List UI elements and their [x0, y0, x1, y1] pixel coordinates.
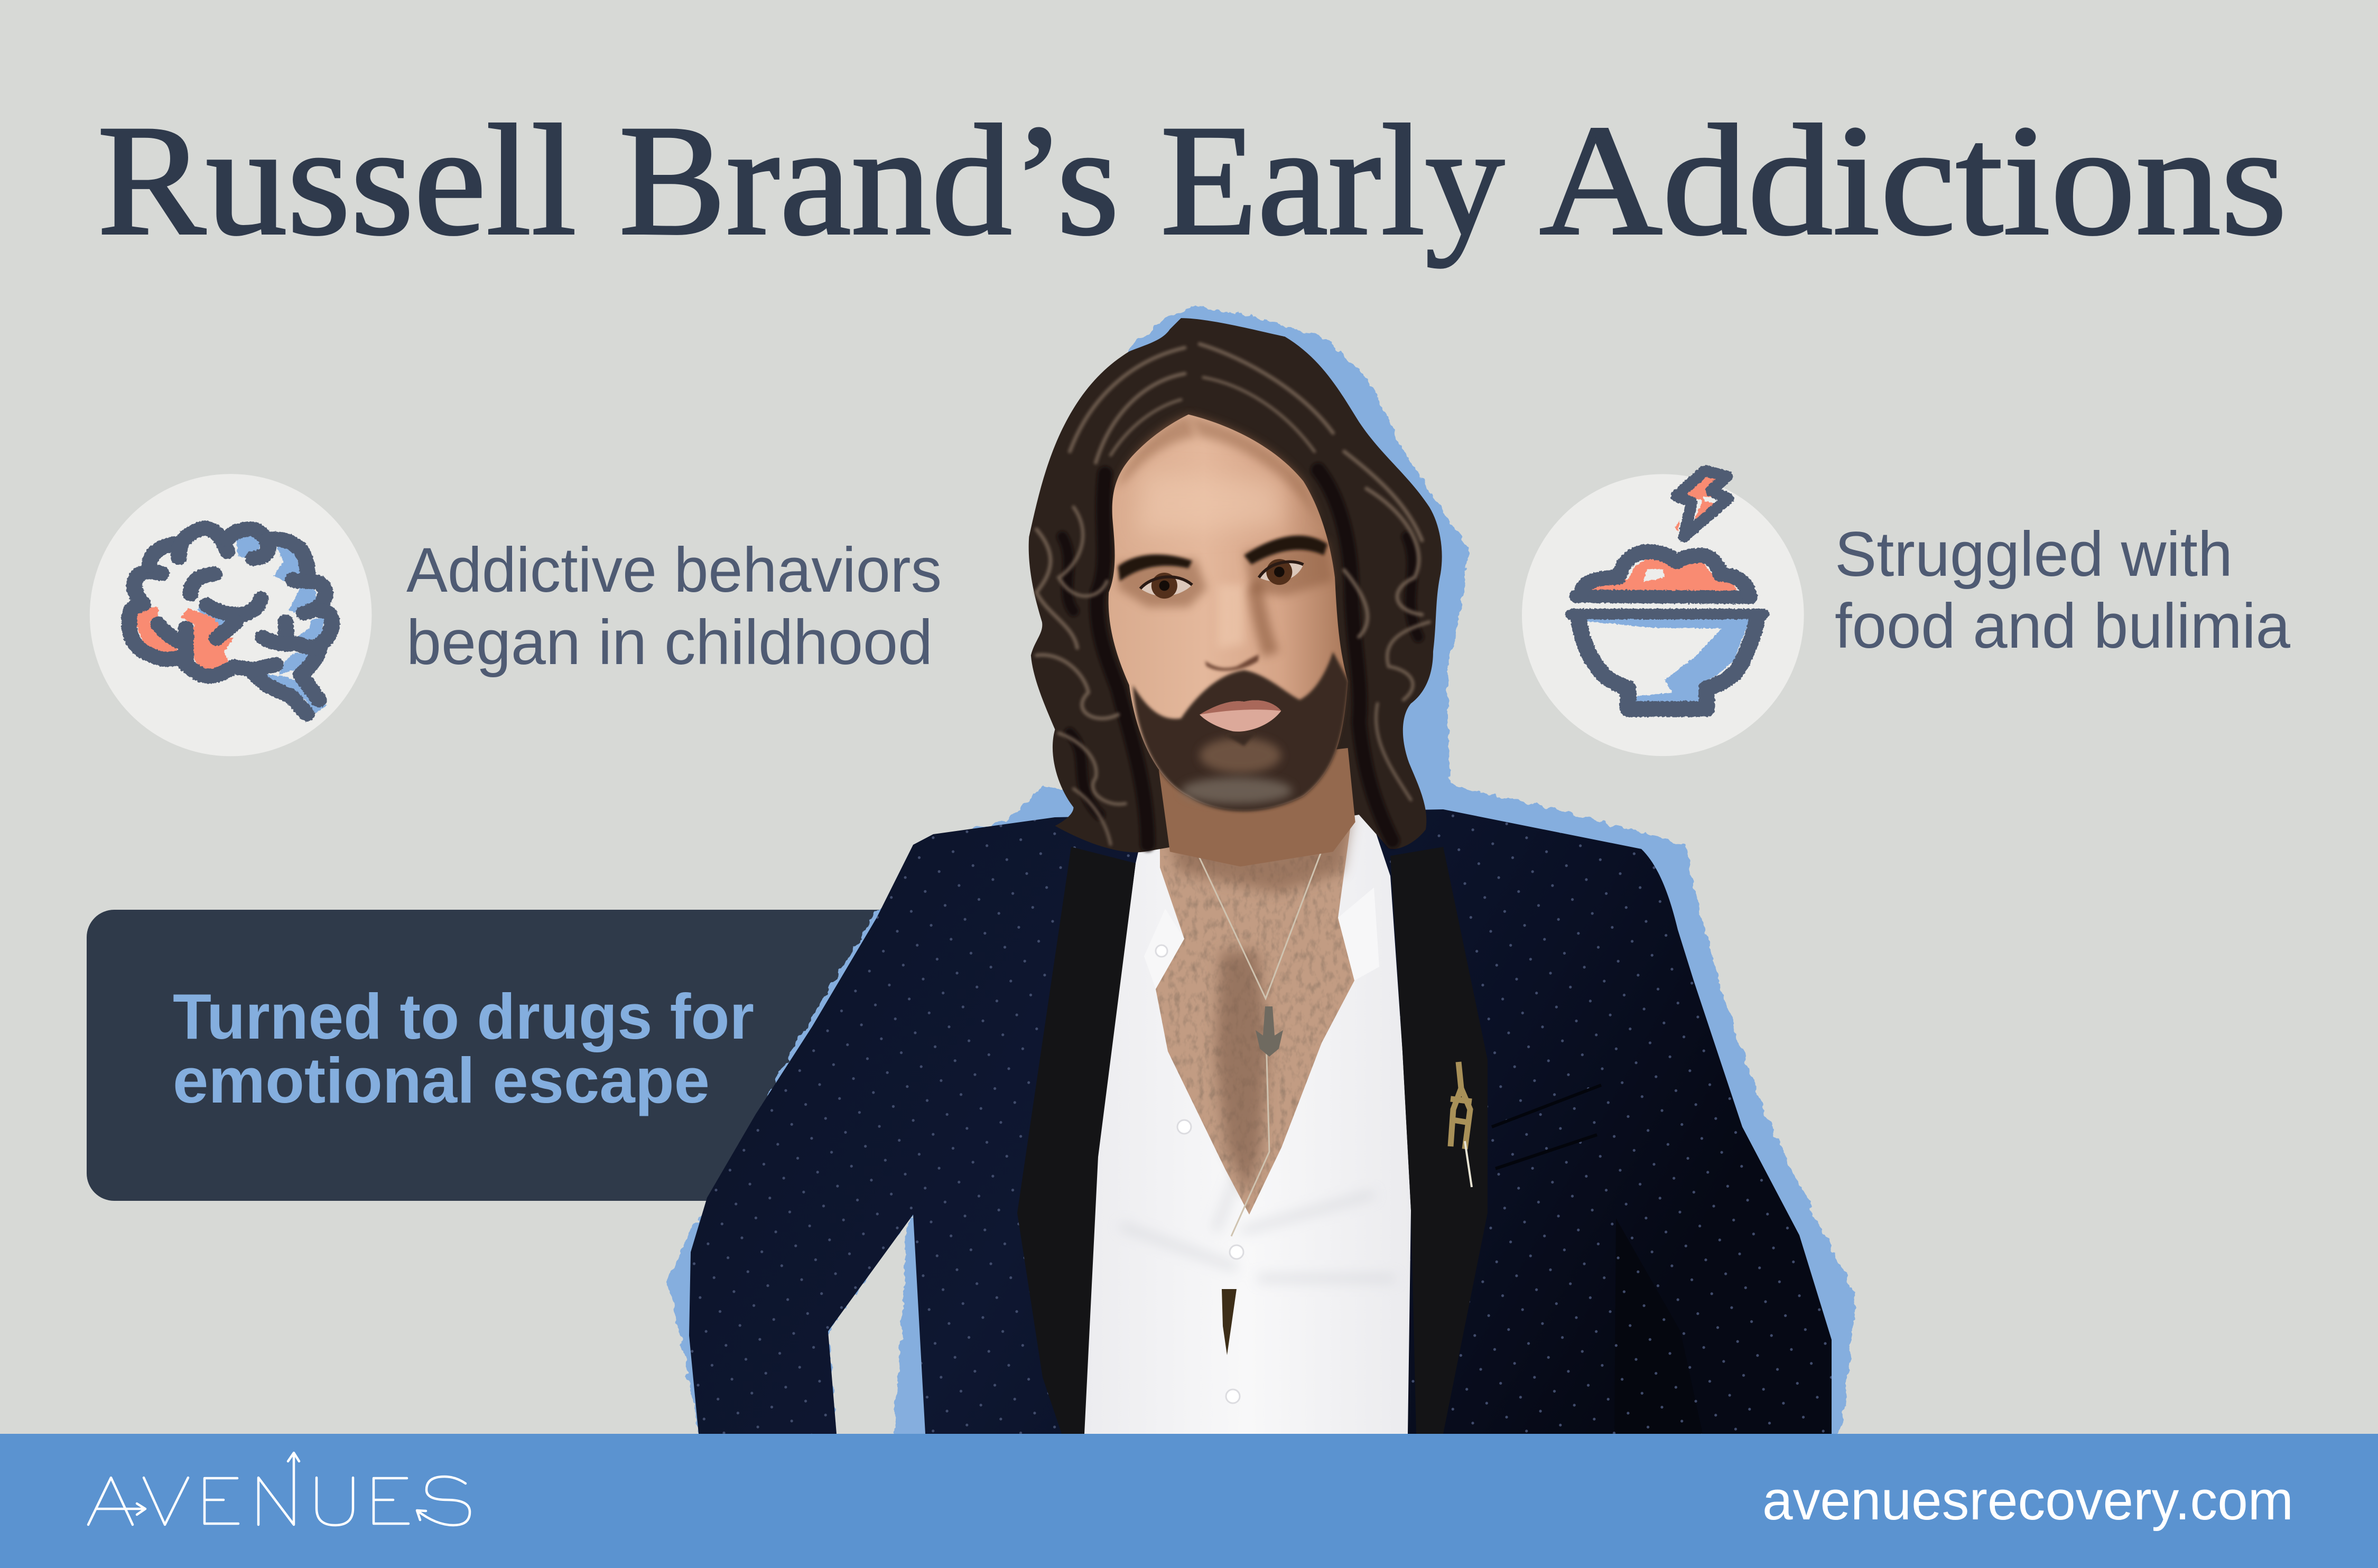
lapel left	[1017, 847, 1136, 1434]
jacket	[689, 809, 1832, 1434]
lapel right	[1390, 847, 1488, 1434]
text: addictive behaviors	[406, 535, 942, 678]
shirt buttons	[1156, 945, 1243, 1403]
portrait with blue torn halo	[666, 305, 1856, 1442]
title: Early	[1160, 92, 1504, 268]
title: Addictions	[1539, 92, 2287, 268]
eyebrows	[1118, 536, 1327, 581]
text: struggled with food	[1835, 519, 2290, 661]
logo: Avenues	[88, 1453, 470, 1525]
panel: callout: emotional escape	[173, 1044, 710, 1116]
hair	[1029, 318, 1442, 852]
lips	[1200, 700, 1281, 732]
title: Brand’s	[619, 92, 1119, 268]
face	[1109, 414, 1348, 810]
panel: callout: Turned to drugs for	[173, 981, 754, 1052]
icon: food bowl with lightning bolt	[1522, 471, 1804, 756]
text: struggled with food: Struggled with	[1835, 519, 2233, 590]
pendant	[1222, 1289, 1237, 1355]
brooch	[1451, 1062, 1472, 1187]
halo	[666, 305, 1856, 1442]
hair strands	[1036, 344, 1429, 844]
panel: callout	[87, 910, 943, 1201]
chest	[1144, 798, 1379, 1236]
eyes	[1140, 559, 1303, 599]
title	[97, 92, 2287, 268]
website url: avenuesrecovery.com	[1762, 1470, 2293, 1532]
text: struggled with food: food and bulimia	[1835, 591, 2290, 661]
neck	[1159, 748, 1355, 866]
head	[1029, 318, 1442, 866]
text: addictive behaviors: Addictive behaviors	[406, 535, 942, 605]
beard	[1133, 651, 1349, 811]
title: Russell	[97, 92, 577, 268]
icon: brain	[90, 474, 371, 756]
text: addictive behaviors: began in childhood	[406, 607, 933, 678]
shirt	[1083, 792, 1411, 1434]
footer bar	[0, 1434, 2378, 1568]
